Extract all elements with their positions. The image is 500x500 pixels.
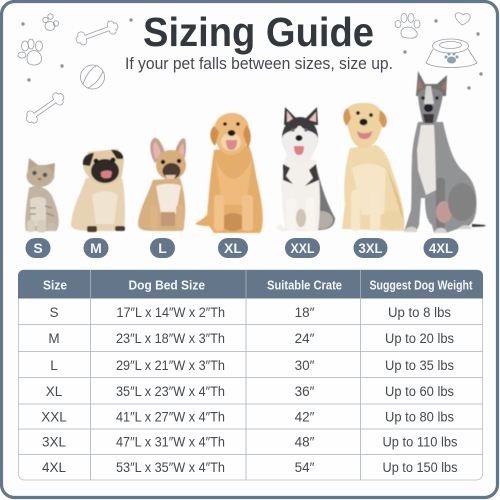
row 4XL: 53″L x 35″W x 4″Th <box>116 460 225 475</box>
row XL: 35″L x 23″W x 4″Th <box>116 384 225 399</box>
icon: bone lower <box>23 90 67 126</box>
row XL: Up to 60 lbs <box>385 384 454 399</box>
bowl paw print <box>444 52 458 64</box>
pill 3XL: 3XL <box>358 240 383 256</box>
row XXL: 41″L x 27″W x 4″Th <box>116 410 225 424</box>
title: Sizing Guide <box>143 9 374 55</box>
pill 4XL <box>424 238 458 258</box>
row S: 18″ <box>295 305 315 320</box>
size pills <box>26 238 458 258</box>
row 4XL: Up to 150 lbs <box>382 460 458 475</box>
row 4XL: 54″ <box>295 460 315 475</box>
row M: M <box>48 331 60 346</box>
row XXL: Up to 80 lbs <box>385 410 454 424</box>
row L: 29″L x 21″W x 3″Th <box>116 358 225 373</box>
table header: Suggest Dog Weight <box>370 278 473 292</box>
decorative dots <box>21 18 483 90</box>
table body <box>18 270 482 480</box>
row 4XL: 4XL <box>42 460 66 475</box>
pill L: L <box>158 240 167 256</box>
table header: Dog Bed Size <box>128 278 205 292</box>
row 3XL: 3XL <box>42 434 66 450</box>
pet: labrador 3XL <box>342 103 404 231</box>
pill 4XL: 4XL <box>429 240 453 256</box>
row M: Up to 20 lbs <box>385 331 454 346</box>
subtitle: If your pet falls between sizes, size up. <box>125 54 393 73</box>
pill 3XL <box>354 238 388 258</box>
row XL <box>46 384 454 399</box>
pill XL <box>218 238 248 258</box>
row XL: XL <box>46 384 63 399</box>
table header: Size <box>43 278 67 292</box>
row L: 30″ <box>295 358 315 373</box>
pets <box>25 71 486 233</box>
pet: great dane 4XL <box>404 71 486 233</box>
pill S: S <box>33 240 43 256</box>
row XXL: XXL <box>41 410 67 424</box>
row XL: 36″ <box>295 384 315 399</box>
sizing table <box>18 270 483 480</box>
row XXL: 42″ <box>295 410 315 424</box>
pet: husky XXL <box>276 107 335 231</box>
row S: 17″L x 14″W x 2″Th <box>116 305 225 320</box>
row S: Up to 8 lbs <box>388 305 451 320</box>
row 3XL: 48″ <box>295 434 315 450</box>
row 3XL: Up to 110 lbs <box>382 434 458 450</box>
icon: ball <box>80 65 104 89</box>
table header: Suitable Crate <box>267 278 342 292</box>
row L <box>50 358 454 373</box>
icon: bone top <box>74 19 120 47</box>
icon: large paw <box>18 39 42 65</box>
row XXL <box>41 410 454 424</box>
pill M <box>84 238 108 258</box>
row L: Up to 35 lbs <box>385 358 454 373</box>
row S: S <box>49 305 59 320</box>
row 3XL <box>42 434 458 450</box>
row M: 23″L x 18″W x 3″Th <box>116 331 225 346</box>
row S <box>49 305 451 320</box>
icon: right paw <box>395 14 420 38</box>
pet: golden retriever XL <box>195 113 263 233</box>
row L: L <box>50 358 58 373</box>
row 4XL <box>42 460 458 475</box>
pill XL: XL <box>224 240 242 256</box>
row 3XL: 47″L x 31″W x 4″Th <box>116 434 225 450</box>
pet: french bulldog L <box>138 138 186 231</box>
pet: pug M <box>71 149 125 232</box>
icon: heart <box>455 13 470 25</box>
table header <box>18 270 483 298</box>
icon: small paw <box>43 14 59 31</box>
decorative icons <box>18 13 477 126</box>
pet: kitten S <box>25 158 59 232</box>
row M <box>48 331 454 346</box>
row M: 24″ <box>295 331 315 346</box>
icon: bowl <box>426 39 477 68</box>
pill S <box>26 238 50 258</box>
pill L <box>150 238 175 258</box>
pill XXL <box>285 238 320 258</box>
pill M: M <box>90 240 102 256</box>
pill XXL: XXL <box>290 240 315 256</box>
